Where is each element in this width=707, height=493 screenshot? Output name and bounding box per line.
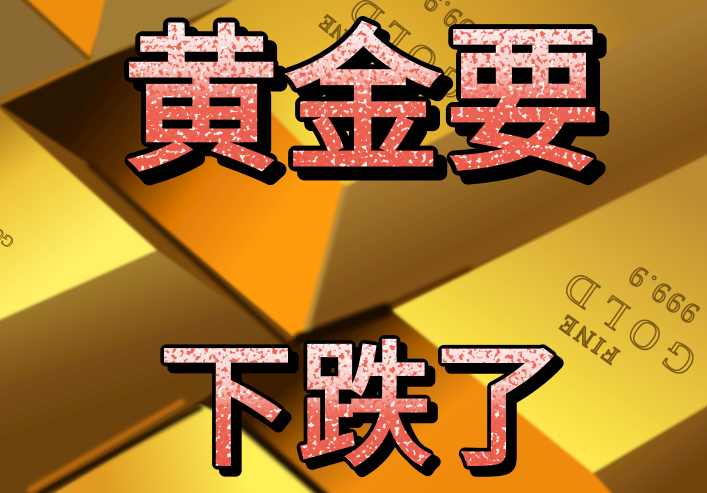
headline: 下跌了: [159, 333, 572, 489]
headline: 下跌了: 下: [166, 340, 300, 489]
headline: 下跌了: 了: [431, 333, 565, 482]
headline: 下跌了: 下: [159, 333, 293, 482]
engraving: FINE GOLD 999.9 on lower bar: GOLD: [547, 256, 705, 385]
headline: 黄金要: 要: [445, 16, 601, 190]
engraving: GOLD on upper bar: FINE: [313, 9, 370, 62]
headline: 黄金要: 金: [285, 16, 441, 190]
central orange face: [0, 25, 345, 345]
top left bar side: [0, 0, 87, 103]
headline: 黄金要: 黄: [132, 25, 288, 199]
headline: 黄金要: 金: [294, 25, 450, 199]
headline: 黄金要: 金: [285, 16, 441, 190]
headline: 下跌了: 了: [438, 340, 572, 489]
headline: 下跌了: 下: [159, 333, 293, 482]
bottom yellow bar: [38, 405, 330, 493]
headline: 黄金要: 要: [445, 16, 601, 190]
headline: 下跌了: 跌: [298, 333, 432, 482]
lower right bar: [392, 150, 707, 473]
headline: 黄金要: 要: [454, 25, 610, 199]
engraving: FINE GOLD 999.9 on lower bar: FINE: [552, 307, 624, 368]
headline: 黄金要: 黄: [123, 16, 279, 190]
headline: 下跌了: 了: [431, 333, 565, 482]
headline: 黄金要: 黄: [123, 16, 279, 190]
left bar side: [0, 250, 285, 493]
upper right bar top face: [187, 0, 707, 187]
top left orange triangle: [17, 0, 110, 57]
headline: 下跌了: 跌: [305, 340, 439, 489]
upper right bar side: [303, 0, 707, 345]
engraving: FINE GOLD 999.9 on lower bar: 999.9: [621, 257, 705, 329]
bottom centre orange: [195, 308, 650, 493]
lower right bar side: [593, 400, 707, 493]
left bar yellow face: [0, 100, 157, 324]
headline: 黄金要: [123, 16, 610, 199]
headline: 下跌了: 跌: [298, 333, 432, 482]
top tan strip: [90, 0, 255, 63]
